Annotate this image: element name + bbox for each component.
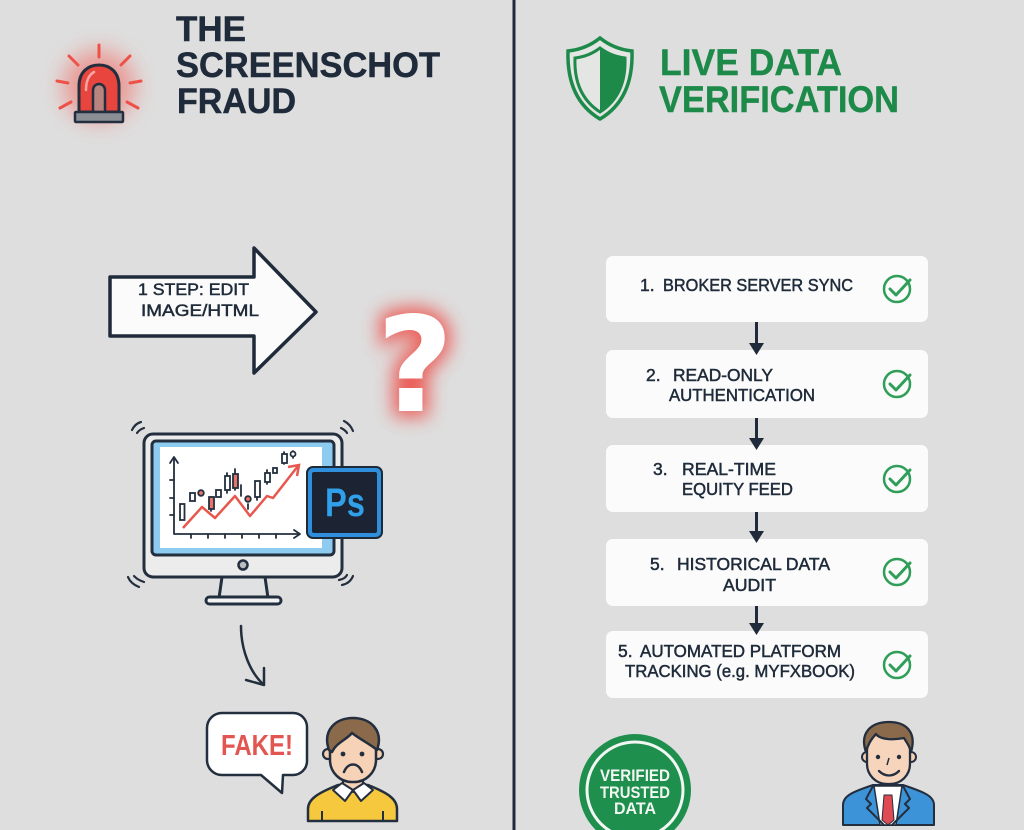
step card 2: read-only authentication: AUTHENTICATION [669,385,815,405]
arrow: step 3 to 4 [749,512,764,543]
step card 1: broker server sync: BROKER SERVER SYNC [663,275,853,295]
icon: glowing question mark: ? [377,289,453,443]
badge: verified trusted data: TRUSTED [600,783,670,802]
step card 3: real-time equity feed [606,445,928,512]
step card 1: broker server sync [606,256,928,322]
icon: monitor with edited chart [128,421,382,604]
arrow: curved down to fake [241,626,264,685]
arrow: step 1 edit image/html: 1 STEP: EDIT [138,280,249,299]
title: live data verification: VERIFICATION [659,79,899,120]
arrow: step 2 to 3 [749,418,764,450]
badge: verified trusted data: VERIFIED [600,766,670,785]
arrow: step 1 edit image/html [110,248,316,373]
badge: verified trusted data [579,734,691,830]
title: the screenshot fraud: SCREENSCHOT [176,46,440,85]
step card 2: read-only authentication: 2. [646,365,661,385]
step card 5: automated platform tracking [606,631,928,698]
icon: photoshop badge: Ps [325,481,365,525]
arrow: step 1 to 2 [749,322,764,355]
arrow: step 1 edit image/html: IMAGE/HTML [141,301,259,320]
title: live data verification [659,42,899,120]
title: the screenshot fraud: FRAUD [177,82,296,121]
step card 4: historical data audit [606,539,928,606]
title: live data verification: LIVE DATA [660,42,842,83]
arrow: step 4 to 5 [749,606,764,635]
step card 4: historical data audit: HISTORICAL DATA [677,554,830,574]
icon: glowing question mark: ? [377,289,453,443]
icon: photoshop badge [307,467,382,538]
step card 5: automated platform tracking: 5. [618,641,633,661]
icon: red siren [57,45,141,122]
step card 3: real-time equity feed: 3. [653,459,668,479]
title: the screenshot fraud: THE [176,10,246,49]
icon: green shield [568,38,632,119]
step card 5: automated platform tracking: AUTOMATED PLATFORM [640,641,841,661]
icon: smiling businessman [843,722,934,825]
step card 2: read-only authentication [606,350,928,418]
speech bubble: fake: FAKE! [221,730,293,762]
step card 4: historical data audit: AUDIT [723,575,776,595]
step card 2: read-only authentication: READ-ONLY [673,365,773,385]
step card 1: broker server sync: 1. [640,275,655,295]
speech bubble: fake [207,713,307,793]
chart: candlesticks and red trend line [170,451,300,538]
step card 5: automated platform tracking: TRACKING (e.g. MYFXBOOK) [625,661,855,681]
title: the screenshot fraud [176,10,440,121]
step card 3: real-time equity feed: REAL-TIME [682,459,776,479]
badge: verified trusted data: DATA [614,799,656,818]
step card 4: historical data audit: 5. [650,554,665,574]
icon: sad person [308,718,397,821]
step card 3: real-time equity feed: EQUITY FEED [682,479,793,499]
